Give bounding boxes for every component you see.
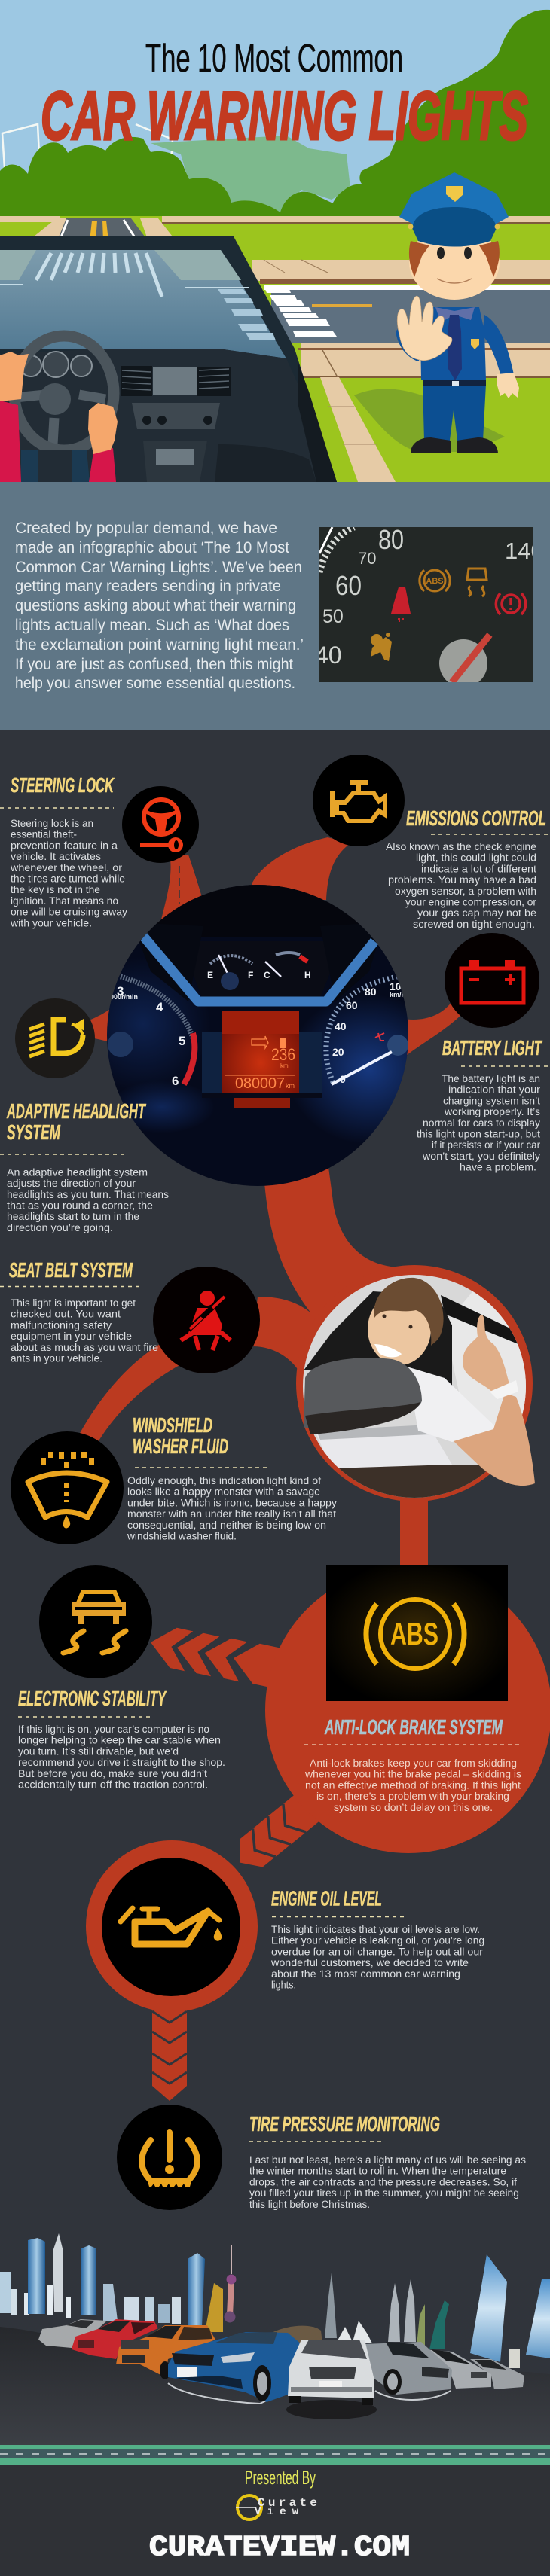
- text: overdue for an oil change. To help out all our: [271, 1946, 484, 1957]
- text: one will be cruising away: [11, 907, 127, 918]
- text: The battery light is an: [442, 1073, 540, 1084]
- crosswalk: [265, 289, 337, 337]
- curate view logo: View: [255, 2506, 299, 2518]
- heading: ADAPTIVE HEADLIGHT: [6, 1099, 147, 1123]
- tachometer arc: [121, 977, 194, 1043]
- text: consequential, and neither is being low on: [127, 1520, 326, 1531]
- text: headlights start to turn in the: [7, 1211, 139, 1222]
- text: screwed on tight enough.: [413, 919, 535, 930]
- photo: speedometer warning lights: 40: [315, 642, 342, 669]
- item: steering lock: [0, 773, 199, 928]
- text: Either your vehicle is leaking oil, or you’re long: [271, 1935, 484, 1946]
- text: [11, 1297, 158, 1364]
- item: battery light: [417, 933, 550, 1173]
- gauge numbers: km/h: [390, 991, 405, 998]
- text: [417, 1073, 541, 1173]
- photo: speedometer warning lights: 60: [335, 570, 362, 601]
- photo: speedometer warning lights: 70: [358, 549, 376, 568]
- icon: tire pressure: [117, 2105, 222, 2210]
- city skyline: [0, 2233, 550, 2368]
- heading: [133, 1413, 228, 1458]
- text: you turn. It’s still drivable, but we’d: [18, 1745, 179, 1757]
- footer bottom band: [0, 2465, 550, 2576]
- distant road: [57, 218, 149, 242]
- title line one: The 10 Most Common: [145, 37, 403, 81]
- icon: seat belt: [153, 1267, 260, 1373]
- officer shoes: [411, 437, 498, 453]
- text: vehicle. It activates: [11, 851, 101, 862]
- dashboard gauge circle: km: [286, 1082, 295, 1090]
- gauge numbers: 80: [365, 986, 377, 998]
- red connector network: [79, 837, 463, 1570]
- gauge numbers: 5: [179, 1034, 185, 1048]
- icon: battery: [445, 933, 539, 1028]
- grass shadow: [354, 389, 505, 452]
- street lamps: [2, 124, 173, 248]
- circle photo: smiling driver: [296, 1265, 535, 1502]
- man shirt: [407, 1367, 497, 1442]
- sidewalk upper: [252, 260, 550, 281]
- officer trousers: [423, 384, 486, 446]
- item: adaptive headlight system: [0, 998, 169, 1233]
- road stripe divider: [0, 2445, 550, 2465]
- intro text: help you answer some essential questions.: [15, 675, 295, 692]
- steering wheel: [14, 336, 114, 450]
- text: indicate a lot of different: [421, 863, 536, 874]
- text: is on, there’s a problem with your braking: [316, 1791, 509, 1802]
- title: [41, 37, 528, 154]
- car: red: [72, 2319, 158, 2359]
- icon: ABS: [326, 1565, 508, 1701]
- heading: ENGINE OIL LEVEL: [271, 1887, 382, 1910]
- text: oxygen sensor, a problem with: [395, 886, 536, 897]
- text: about as much as you want fire: [11, 1342, 158, 1353]
- text: [386, 841, 537, 930]
- chevron arrows: ABS to engine oil: [228, 1786, 328, 1876]
- text: Also known as the check engine: [386, 841, 536, 852]
- intro text: Created by popular demand, we have: [15, 520, 277, 537]
- officer hand down: [497, 373, 519, 398]
- text: adjusts the direction of your: [7, 1178, 136, 1189]
- text: This light indicates that your oil levels are low.: [271, 1924, 480, 1935]
- heading: WASHER FLUID: [133, 1434, 228, 1458]
- dashboard: [0, 349, 337, 482]
- text: system so don’t delay on this one.: [334, 1802, 493, 1813]
- car: silver far right: [470, 2359, 524, 2389]
- car: orange: [116, 2325, 215, 2379]
- text: direction you’re going.: [7, 1222, 113, 1233]
- chevron arrows: ABS to electronic stability: [146, 1623, 282, 1688]
- road: [271, 290, 550, 343]
- text: your gas cap may not be: [417, 907, 536, 919]
- text: [304, 1757, 521, 1813]
- text: [249, 2154, 526, 2210]
- icon: adaptive headlight: [15, 998, 95, 1078]
- text: the tires are turned while: [11, 873, 125, 884]
- gauge numbers: 20: [332, 1046, 344, 1058]
- presented by: Presented By: [245, 2466, 316, 2489]
- officer torso: [420, 307, 486, 380]
- text: equipment in your vehicle: [11, 1331, 132, 1342]
- text: malfunctioning safety: [11, 1319, 112, 1331]
- text: indication that your: [448, 1084, 541, 1096]
- photo: speedometer warning lights: 80: [378, 524, 404, 555]
- text: with your vehicle.: [10, 917, 92, 928]
- text: about the 13 most common car warning: [271, 1968, 460, 1980]
- left trees: [0, 137, 335, 218]
- text: [10, 818, 127, 928]
- text: problems. You may have a bad: [388, 874, 536, 886]
- car: silver SUV: [363, 2342, 452, 2395]
- gauge numbers: 000r/min: [110, 993, 138, 1001]
- intro text: Common Car Warning Lights’. We’ve been: [15, 559, 302, 576]
- item: windshield washer fluid: [11, 1413, 337, 1544]
- text: ignition. That means no: [11, 895, 118, 907]
- bird nest stadium: [260, 2326, 322, 2343]
- intro text: getting many readers sending in private: [15, 578, 281, 595]
- icon: check engine: [313, 755, 405, 846]
- heading: ELECTRONIC STABILITY: [18, 1687, 167, 1710]
- text: under bite. Which is ironic, because a happy: [127, 1497, 337, 1508]
- text: [270, 1924, 484, 1991]
- gauge numbers: 60: [346, 999, 358, 1011]
- man thumb up hand: [463, 1315, 511, 1393]
- far pale trees: [151, 136, 350, 212]
- heading: STEERING LOCK: [11, 773, 115, 797]
- pearl tower: [225, 2245, 237, 2322]
- dashboard gauge circle: 080007: [235, 1075, 285, 1092]
- text: monster with an under bite really isn’t all that: [127, 1508, 336, 1520]
- text: recommend you drive it straight to the shop.: [18, 1757, 225, 1768]
- text: [18, 1724, 225, 1791]
- text: If this light is on, your car’s computer is no: [18, 1724, 209, 1735]
- gauge numbers: F: [248, 970, 253, 980]
- item: electronic stability: [18, 1565, 225, 1791]
- car: silver far left: [38, 2319, 107, 2348]
- dash vents and screen: [121, 366, 231, 482]
- panel: intro: [0, 482, 550, 730]
- text: light, this could light could: [416, 852, 536, 864]
- gauge numbers: C: [264, 970, 270, 980]
- intro text: made an infographic about ‘The 10 Most: [15, 539, 289, 556]
- car frame: [0, 236, 337, 482]
- text: looks like a happy monster with a savage: [127, 1486, 320, 1498]
- gauge numbers: H: [304, 970, 311, 980]
- gauge numbers: E: [207, 970, 213, 980]
- text: Last but not least, here’s a light many of us will be seeing as: [249, 2154, 526, 2166]
- text: charging system isn’t: [443, 1095, 540, 1106]
- panel: warning lights background: [0, 730, 550, 2576]
- gauge numbers: 6: [172, 1074, 179, 1088]
- windshield glass: [0, 250, 286, 358]
- sidewalk lower: [301, 343, 550, 377]
- car lineup: [38, 2319, 524, 2405]
- intro text: questions asking about what their warning: [15, 597, 296, 614]
- gauge numbers: [110, 970, 408, 1088]
- text: Oddly enough, this indication light kind of: [127, 1475, 321, 1486]
- chevron arrows: engine oil to tire pressure: [152, 2007, 187, 2101]
- text: accidentally turn off the traction control.: [18, 1779, 208, 1791]
- text: essential theft-: [11, 829, 77, 840]
- right trees: [322, 10, 550, 218]
- heading: [6, 1099, 147, 1144]
- item: engine oil level: [86, 1840, 484, 2012]
- icon: washer fluid: [11, 1431, 124, 1544]
- text: headlights as you turn. That means: [7, 1189, 169, 1200]
- car: white front: [288, 2340, 374, 2405]
- text: lights.: [271, 1979, 296, 1991]
- hero illustration: [0, 0, 550, 482]
- text: whenever the wheel, or: [10, 862, 123, 873]
- photo: speedometer warning lights: 140: [505, 538, 544, 564]
- intro text: [15, 520, 304, 692]
- text: the winter months start to roll in. When the temperature: [249, 2166, 506, 2177]
- car: blue sedan: [168, 2332, 301, 2402]
- text: prevention feature in a: [11, 840, 118, 851]
- gauge numbers: 100: [390, 980, 408, 992]
- gauge numbers: 0: [340, 1073, 346, 1085]
- curate view logo: [236, 2495, 317, 2520]
- gauge numbers: 3: [117, 984, 124, 998]
- text: this light before Christmas.: [249, 2199, 370, 2210]
- text: [127, 1475, 337, 1542]
- website: CURATEVIEW.COM: [149, 2532, 410, 2564]
- curate view logo: Curate: [258, 2496, 317, 2510]
- item: anti-lock brake system: [265, 1565, 550, 1853]
- small gauges: [210, 956, 252, 964]
- heading: WINDSHIELD: [133, 1413, 212, 1437]
- text: longer helping to keep the car stable when: [18, 1735, 221, 1746]
- intro text: If you are just as confused, then this might: [15, 656, 293, 673]
- driver arms and hands: [0, 352, 118, 482]
- intro text: the exclamation point warning light mean.’: [15, 636, 304, 654]
- text: ants in your vehicle.: [11, 1352, 102, 1364]
- text: if it persists or if your car: [432, 1139, 540, 1151]
- gauge numbers: 40: [335, 1020, 347, 1032]
- photo: speedometer warning lights: [319, 527, 533, 682]
- item: tire pressure monitoring: [117, 2105, 526, 2210]
- officer arm down: [482, 315, 514, 376]
- icon: skidding car: [39, 1565, 152, 1678]
- text: drops, the air contracts and the pressure decreases. So, if: [249, 2176, 517, 2187]
- text: checked out. You want: [11, 1309, 121, 1320]
- text: windshield washer fluid.: [127, 1530, 237, 1542]
- officer head: [409, 226, 500, 300]
- blue instrument cowl: [143, 936, 374, 1001]
- text: wonderful customers, we decided to write: [270, 1957, 469, 1968]
- dashboard gauge circle: 236: [271, 1045, 295, 1064]
- heading: SYSTEM: [7, 1120, 60, 1144]
- man face: [368, 1293, 431, 1365]
- text: the key is not in the: [11, 884, 100, 895]
- car side mirror: [304, 1358, 422, 1431]
- text: your engine compression, or: [405, 896, 537, 908]
- ground: [0, 216, 550, 482]
- icon: oil can: [86, 1840, 258, 2012]
- text: not an effective method of braking. If this light: [305, 1779, 521, 1791]
- text: This light is important to get: [11, 1297, 136, 1309]
- intro text: lights actually mean. Such as ‘What does: [15, 617, 289, 634]
- text: that as you round a corner, the: [7, 1200, 153, 1211]
- text: won’t start, you definitely: [422, 1151, 540, 1162]
- text: Steering lock is an: [11, 818, 93, 829]
- dashboard gauge circle: [107, 885, 408, 1186]
- text: working properly. It’s: [444, 1106, 540, 1117]
- text: whenever you hit the brake pedal – skidding is: [304, 1769, 521, 1780]
- photo: speedometer warning lights: ABS: [426, 577, 444, 586]
- police officer: [396, 172, 519, 453]
- red ABS circle: [265, 1567, 550, 1853]
- item: seat belt system: [0, 1258, 260, 1373]
- officer cap: [399, 172, 509, 247]
- gauge numbers: 4: [156, 1000, 163, 1014]
- officer stop hand: [397, 296, 452, 361]
- item: emissions control: [313, 755, 550, 930]
- officer collar and tie: [435, 307, 475, 322]
- heading: SEAT BELT SYSTEM: [9, 1258, 133, 1282]
- centre display: [202, 1032, 322, 1096]
- photo: speedometer warning lights: 50: [322, 606, 344, 627]
- text: normal for cars to display: [423, 1117, 540, 1129]
- text: [7, 1166, 169, 1233]
- icon: steering wheel and key: [122, 786, 199, 863]
- text: have a problem.: [460, 1162, 536, 1173]
- man arm: [454, 1393, 535, 1486]
- dashboard gauge circle: km: [280, 1062, 289, 1069]
- road: [0, 2327, 550, 2445]
- text: you filled your tires up in the summer, you might be seeing: [249, 2187, 519, 2199]
- speedometer arc: [326, 977, 397, 1082]
- text: this light upon start-up, but: [417, 1128, 540, 1140]
- text: But before you do, make sure you didn’t: [18, 1768, 207, 1779]
- text: An adaptive headlight system: [7, 1166, 148, 1178]
- text: Anti-lock brakes keep your car from skidding: [310, 1757, 517, 1769]
- car: silver right: [423, 2349, 491, 2389]
- icon: ABS: ABS: [390, 1616, 438, 1651]
